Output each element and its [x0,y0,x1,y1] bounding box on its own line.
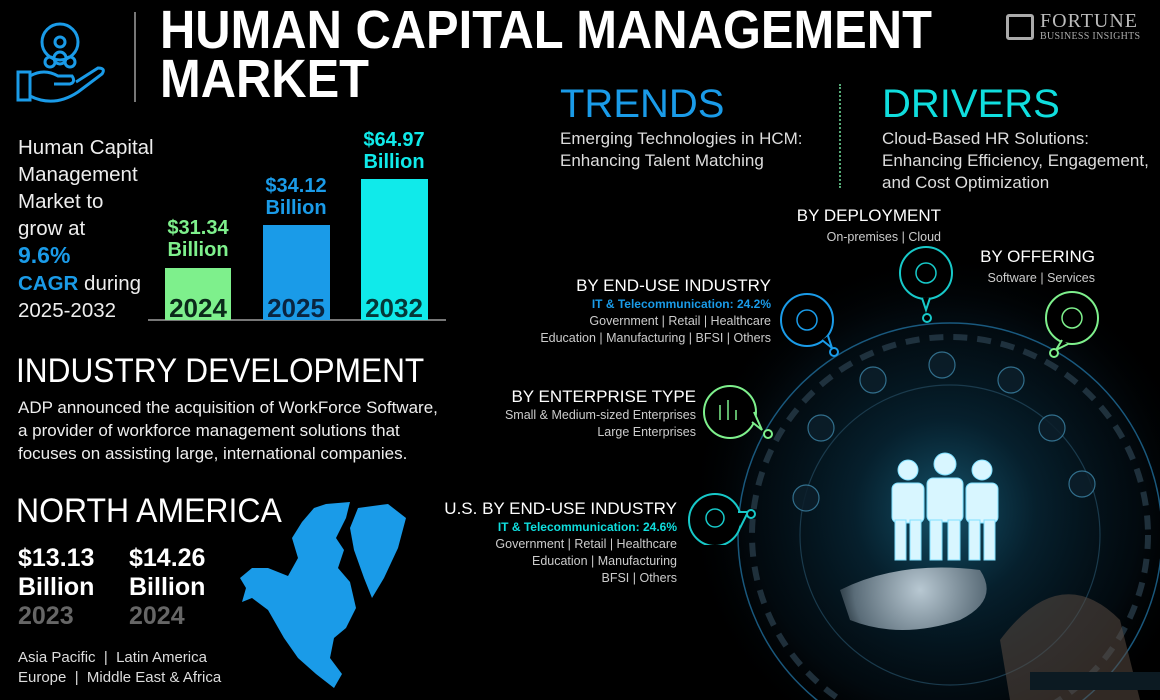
bar chart: 2025 [267,293,325,323]
heading: trends: TRENDS [560,82,724,126]
stat: 2024 [129,544,205,630]
segment: by offering: Software | Services [988,271,1095,285]
segment: by offering: BY OFFERING [980,247,1095,266]
segment: by enterprise type: Large Enterprises [597,425,696,439]
bar chart: $34.12 [265,175,327,197]
stat: 2024: 2024 [129,602,185,630]
text: other regions: Europe | Middle East & Africa [18,669,221,686]
divider dotted [839,84,841,188]
text: industry development: ADP announced the acquisition of WorkForce Software, [18,398,438,417]
text: drivers: Enhancing Efficiency, Engagement, [882,151,1149,170]
stat: 2024: Billion [129,573,205,601]
segment: by end-use industry: IT & Telecommunication: 24.2% [592,297,771,311]
segment: by offering [980,247,1095,285]
text: trends: Emerging Technologies in HCM: [560,129,803,148]
heading: drivers: DRIVERS [882,82,1060,126]
segment: by deployment [797,206,941,244]
title: MARKET [160,49,369,109]
logo: Fortune Business Insights: FORTUNE [1040,10,1138,32]
segment: by end-use industry: Government | Retail | Healthcare [589,314,771,328]
stat: 2024: $14.26 [129,544,205,572]
segment: u.s. by end-use industry [444,499,677,585]
heading: north america: NORTH AMERICA [16,492,282,530]
bar chart: Billion [167,239,229,261]
text: CAGR summary: Human Capital [18,136,154,159]
background graphic: digital circle with hand [734,299,1160,700]
text: industry development: focuses on assisting large, international companies. [18,444,407,463]
stat: 2023: Billion [18,573,94,601]
text: trends: Enhancing Talent Matching [560,151,764,170]
segment: by end-use industry: Education | Manufacturing | BFSI | Others [540,331,771,345]
icon bubbles on ring [688,246,1099,545]
text: other regions: Asia Pacific | Latin America [18,649,207,666]
segment: u.s. by end-use industry: BFSI | Others [602,571,677,585]
segment: by end-use industry [540,276,771,345]
bar chart: Billion [363,151,425,173]
segment: by deployment: BY DEPLOYMENT [797,206,941,225]
text: CAGR summary: Management [18,163,138,186]
title [160,0,932,109]
segment: by enterprise type: BY ENTERPRISE TYPE [511,387,696,406]
segment: by deployment: On-premises | Cloud [827,230,941,244]
text: other regions [18,649,222,686]
text: CAGR summary: 9.6% [18,242,70,268]
bar chart: $64.97 [363,129,425,151]
text: CAGR summary [18,136,154,322]
logo: Fortune Business Insights: BUSINESS INSIGHTS [1040,31,1140,42]
text: drivers [882,129,1149,192]
stat: 2023 [18,544,94,630]
text: CAGR summary: CAGR during [18,272,141,295]
stat: 2023: $13.13 [18,544,94,572]
text: industry development: a provider of workforce management solutions that [18,421,400,440]
stat: 2023: 2023 [18,602,74,630]
segment: u.s. by end-use industry: Education | Manufacturing [532,554,677,568]
logo: Fortune Business Insights [1006,10,1140,42]
text: CAGR summary: Market to [18,190,103,213]
text: drivers: Cloud-Based HR Solutions: [882,129,1089,148]
segment: by end-use industry: BY END-USE INDUSTRY [576,276,771,295]
bar chart: $31.34 [167,217,229,239]
icon: central people [892,452,998,560]
divider line [134,12,136,102]
text: drivers: and Cost Optimization [882,173,1049,192]
title: HUMAN CAPITAL MANAGEMENT [160,0,932,60]
text: trends [560,129,803,170]
heading: industry development: INDUSTRY DEVELOPMENT [16,352,424,390]
bar chart [148,129,446,323]
map: north america [240,502,406,688]
segment: u.s. by end-use industry: IT & Telecommunication: 24.6% [498,520,677,534]
text: CAGR summary: 2025-2032 [18,299,116,322]
text: industry development [18,398,438,463]
bar chart: Billion [265,197,327,219]
bar chart: 2024 [169,293,227,323]
segment: by enterprise type [505,387,696,439]
bar chart: 2032 [365,293,423,323]
small circle icons on ring [792,351,1096,512]
segment: u.s. by end-use industry: U.S. BY END-USE INDUSTRY [444,499,677,518]
segment: u.s. by end-use industry: Government | Retail | Healthcare [495,537,677,551]
text: CAGR summary: grow at [18,217,85,240]
segment: by enterprise type: Small & Medium-sized Enterprises [505,408,696,422]
icon: header hand with people and gear [16,22,105,103]
